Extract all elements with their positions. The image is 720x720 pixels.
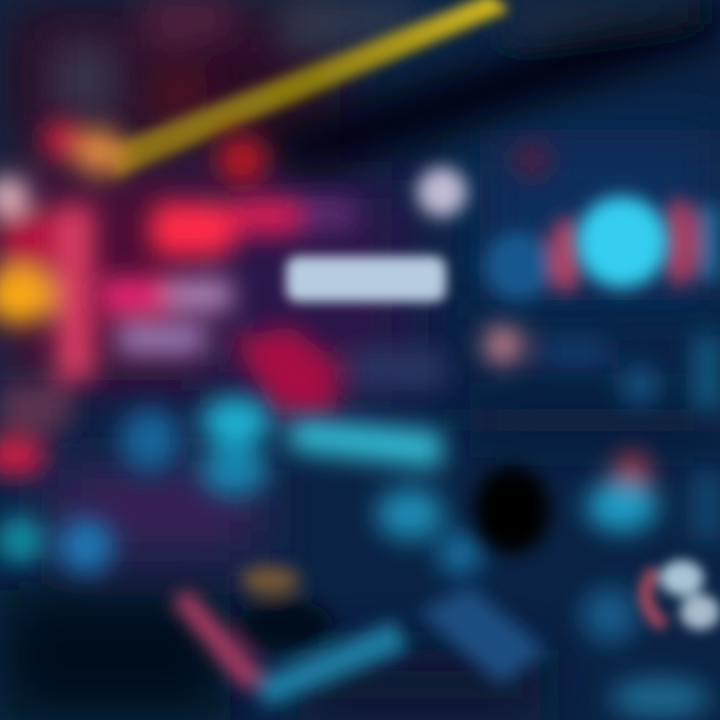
panel: cyan blocks	[0, 397, 482, 576]
gauge side arcs	[484, 198, 720, 300]
icon: white dot	[417, 167, 467, 217]
gauge centre	[576, 196, 668, 288]
panel: right lower widgets	[484, 142, 720, 718]
icon: black circle	[474, 466, 550, 554]
icon: white and red cluster	[646, 560, 720, 630]
panel: left warm glows	[0, 120, 268, 476]
panel: dark top band	[50, 0, 720, 170]
chart: cyan gauge	[484, 196, 720, 300]
white text pill	[286, 256, 446, 302]
panel: bottom strokes	[170, 566, 548, 708]
panel: central heading bars	[98, 196, 445, 415]
diagonal yellow beam	[105, 0, 510, 178]
